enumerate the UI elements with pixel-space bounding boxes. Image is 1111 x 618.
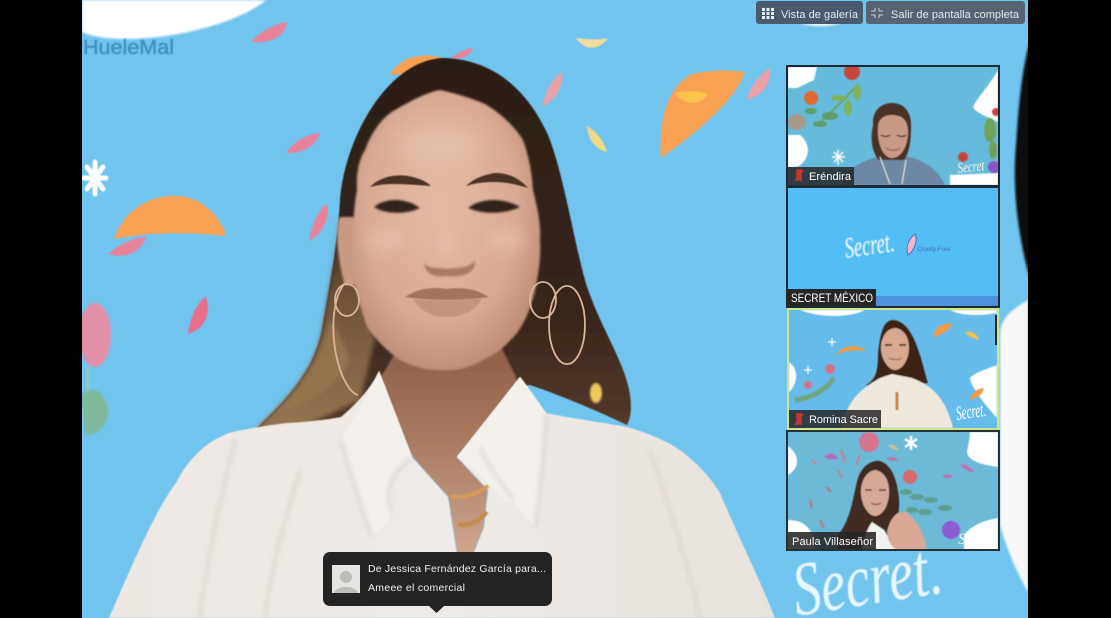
hair lower left lighter <box>257 210 375 428</box>
petals, flower and leaves <box>810 432 974 539</box>
forehead highlight <box>400 123 480 164</box>
pink rose with leaf <box>79 303 111 434</box>
white blobs <box>788 67 998 185</box>
icon: muted microphone <box>795 414 803 425</box>
Secret logo fragment: S <box>958 531 966 548</box>
neck and chest <box>379 345 520 555</box>
name tag: Romina Sacre <box>789 410 881 428</box>
hair base <box>257 58 631 428</box>
cheek highlights <box>367 229 401 252</box>
eyebrows <box>370 175 431 187</box>
right collar <box>457 377 546 527</box>
name: Secret México: SECRET MÉXICO <box>791 290 873 305</box>
eyes <box>374 200 420 213</box>
icon: feather cruelty-free logo <box>907 234 951 255</box>
name: Romina Sacre: Romina Sacre <box>809 414 878 426</box>
panel: thumbnail Romina Sacre, active speaker <box>787 308 999 430</box>
dark edge of person at right <box>1015 40 1030 280</box>
panel: thumbnail Paula Villaseñor <box>786 430 1000 551</box>
chat sender: De Jessica Fernández García para... <box>368 563 546 575</box>
white flower <box>84 162 106 194</box>
icon: exit full screen <box>871 8 883 18</box>
hashtag text: HueleMal <box>83 37 174 59</box>
petals and leaves <box>795 324 984 400</box>
name tag: Secret México <box>788 289 876 306</box>
label: gallery view: Vista de galería <box>781 9 859 21</box>
leaves and fruits <box>788 64 1000 173</box>
name tag: Eréndira <box>788 167 854 185</box>
nose shadow <box>424 261 475 276</box>
white blobs <box>789 310 997 418</box>
chat message: Ameee el comercial <box>368 582 465 594</box>
hair highlight strand <box>286 322 350 408</box>
background <box>788 67 998 185</box>
person: Romina <box>842 320 953 428</box>
icon: default avatar <box>332 565 360 593</box>
shirt <box>109 371 775 618</box>
icon: feather cruelty-free logo: Cruelty-Free <box>917 247 951 253</box>
mouth <box>405 288 489 300</box>
ear <box>337 217 358 285</box>
Secret logo: Secret. <box>842 225 896 265</box>
name: Paula Villaseñor: Paula Villaseñor <box>792 536 873 548</box>
icon: gallery grid <box>762 8 774 19</box>
yellow petal spot <box>590 383 602 403</box>
name tag: Paula Villaseñor <box>788 532 876 549</box>
name: Eréndira: Eréndira <box>809 171 852 183</box>
footer bar <box>876 296 998 306</box>
Secret logo: Secret. <box>955 399 987 425</box>
white blobs <box>788 432 998 550</box>
person: Eréndira <box>842 103 945 185</box>
button: gallery view <box>756 1 863 24</box>
Secret logo: Secret <box>957 158 986 177</box>
background <box>789 310 997 428</box>
chat notification popup <box>323 552 552 613</box>
dark edge at right <box>995 315 997 345</box>
person: main speaker <box>109 58 775 618</box>
earrings <box>333 282 585 395</box>
label: exit full screen: Salir de pantalla completa <box>891 9 1020 21</box>
background <box>788 432 998 550</box>
icon: muted microphone <box>795 170 803 181</box>
orange and pink petals <box>108 22 770 334</box>
shirt fold shadows <box>200 413 700 618</box>
necklace <box>451 486 488 497</box>
face <box>352 90 540 370</box>
person: Paula <box>838 461 927 550</box>
panel: thumbnail Eréndira <box>786 64 1000 187</box>
panel: thumbnail Secret México <box>786 187 1000 308</box>
left collar <box>374 370 412 458</box>
button: exit full screen <box>866 1 1025 24</box>
